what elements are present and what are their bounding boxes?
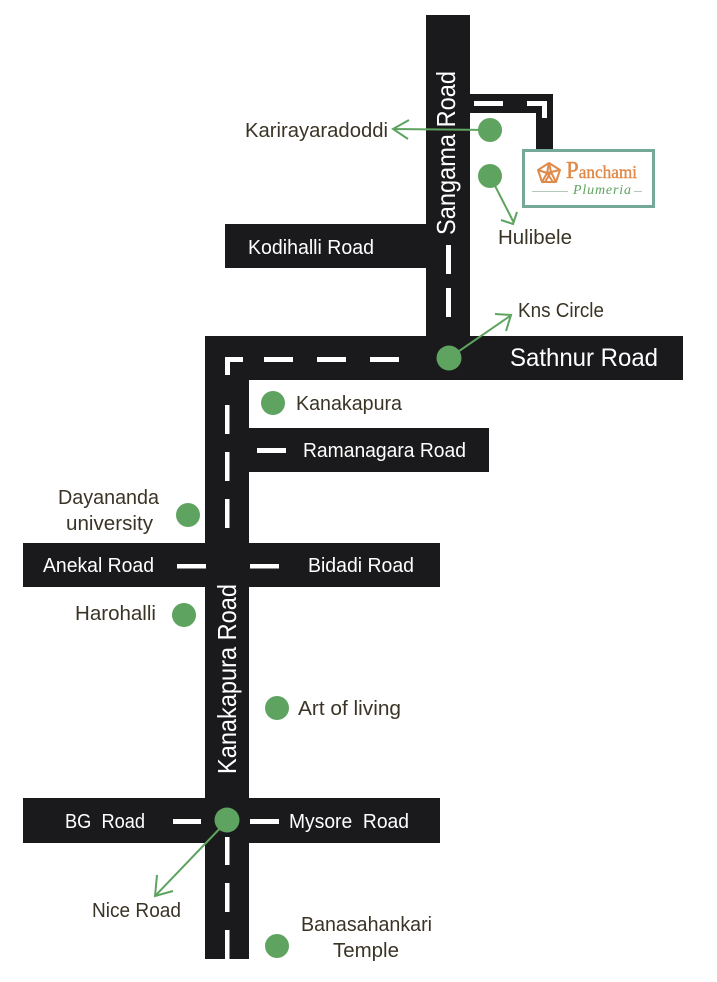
place: Nice Road with arrow xyxy=(92,808,240,922)
place: Hulibele with arrow xyxy=(478,164,572,249)
place: Harohalli xyxy=(75,603,196,627)
place: Kns Circle with arrow xyxy=(436,300,604,370)
road label: Kodihalli Road: Kodihalli Road xyxy=(248,237,374,259)
icon: pentagon flower xyxy=(538,163,560,182)
place: Hulibele with arrow: Hulibele xyxy=(498,227,572,249)
road label: Sathnur Road: Sathnur Road xyxy=(510,344,658,372)
road label: Sangama Road: Sangama Road xyxy=(431,71,461,235)
place: Kanakapura: Kanakapura xyxy=(296,393,403,415)
road label: BG Road: BG Road xyxy=(65,811,145,833)
place: Kns Circle with arrow: Kns Circle xyxy=(518,300,604,322)
road centre dashes xyxy=(173,101,547,959)
road label: Ramanagara Road: Ramanagara Road xyxy=(303,440,466,462)
road label: Bidadi Road: Bidadi Road xyxy=(308,555,414,577)
logo tagline: Plumeria xyxy=(572,183,631,198)
place: Banasahankari Temple: Temple xyxy=(333,940,399,962)
place: Banasahankari Temple: Banasahankari xyxy=(301,914,432,936)
place: Dayananda university xyxy=(58,487,200,535)
place: Dayananda university: Dayananda xyxy=(58,487,160,509)
place: Dayananda university: university xyxy=(66,513,153,535)
road label: Mysore Road: Mysore Road xyxy=(289,811,409,833)
place: Harohalli: Harohalli xyxy=(75,603,156,625)
place: Art of living xyxy=(265,696,401,720)
place: Karirayaradoddi with arrow xyxy=(245,118,502,142)
logo wordmark: Panchami xyxy=(566,158,637,184)
logo: Panchami Plumeria xyxy=(524,150,654,206)
place: Karirayaradoddi with arrow: Karirayaradoddi xyxy=(245,120,388,142)
place: Nice Road with arrow: Nice Road xyxy=(92,900,181,922)
place: Kanakapura xyxy=(261,391,403,415)
place: Art of living: Art of living xyxy=(298,698,401,720)
place: Banasahankari Temple xyxy=(265,914,432,962)
road label: Anekal Road: Anekal Road xyxy=(43,555,154,577)
road label: Kanakapura Road: Kanakapura Road xyxy=(212,584,242,774)
